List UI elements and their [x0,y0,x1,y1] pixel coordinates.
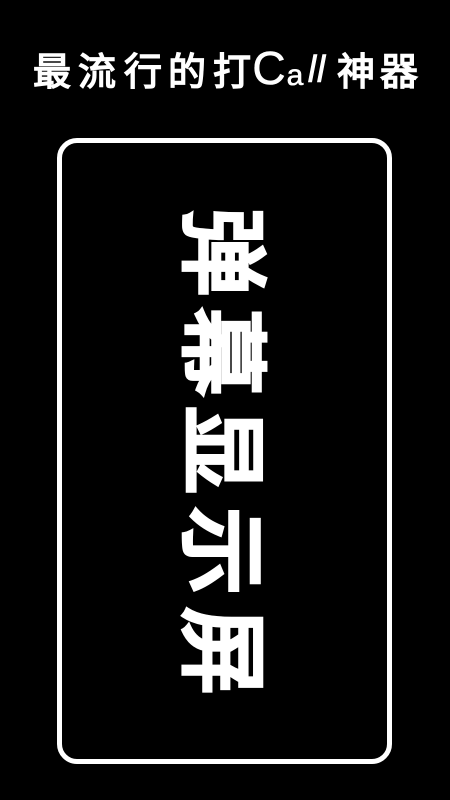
title: 行 [124,41,162,96]
title: 打 [213,41,251,96]
rotated vertical text: 弹幕显示屏: 幕 [165,308,292,396]
title: C [252,42,286,94]
title: 最 [33,41,71,96]
title: 的 [168,41,206,96]
rotated vertical text: 弹幕显示屏: 示 [165,507,292,595]
title: l [308,49,316,91]
title: a [287,59,303,92]
rotated vertical text: 弹幕显示屏: 显 [165,406,292,494]
rotated vertical text: 弹幕显示屏: 屏 [165,607,292,695]
panel: rounded display frame [57,138,392,764]
rotated vertical text: 弹幕显示屏: 弹 [165,208,292,296]
title [33,41,418,96]
title: l [317,49,325,91]
title: 神 [337,41,375,96]
title: 器 [380,41,418,96]
title: 流 [78,41,116,96]
